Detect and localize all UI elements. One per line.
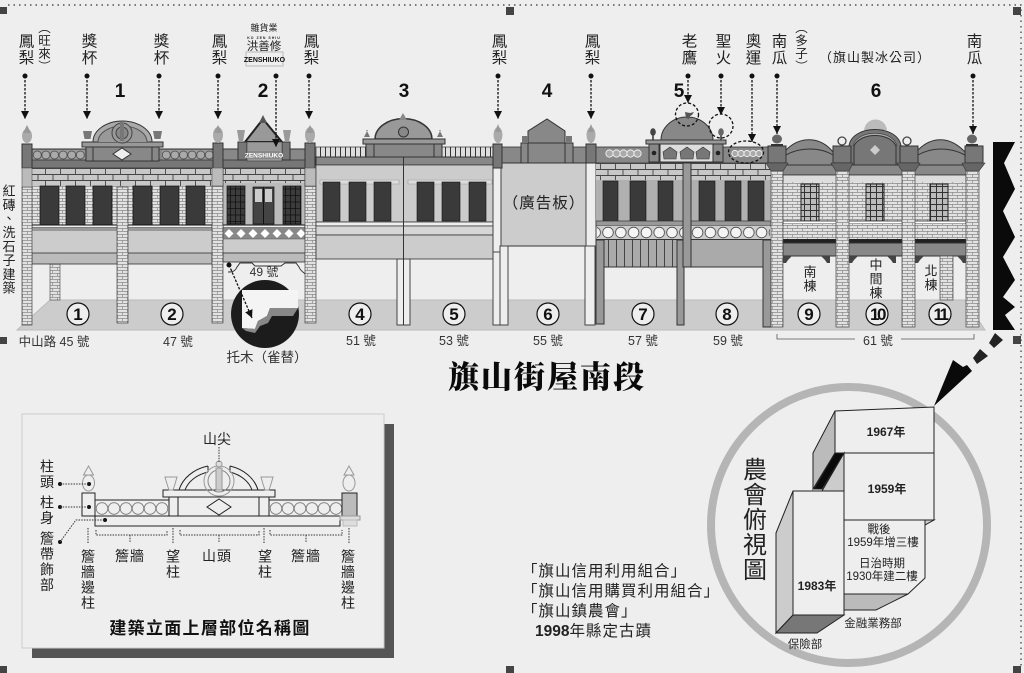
house number labels: 61 號 [863, 333, 893, 348]
panel: elevation naming diagram [22, 414, 394, 658]
circled numbers: 2 [167, 305, 177, 324]
house number labels: 53 號 [439, 333, 469, 348]
circled numbers: 4 [355, 305, 365, 324]
diagram labels: 望柱 [165, 549, 181, 580]
circled numbers: 7 [638, 305, 648, 324]
main title: 旗山街屋南段 [448, 360, 646, 395]
top labels: 聖火 [714, 33, 731, 66]
section numbers: 5 [674, 81, 685, 102]
pediment 5 with eagle, flame and Olympic ornaments [646, 112, 726, 162]
billboard [501, 163, 587, 246]
diagram labels: 簷帶飾部 [39, 531, 55, 593]
top labels: 獎杯 [80, 33, 97, 66]
roof blocks [776, 407, 934, 633]
roof scallops [786, 140, 965, 165]
leader lines [58, 447, 349, 544]
block labels: 1983年 [798, 578, 836, 593]
top labels: （多子） [793, 21, 807, 73]
dashed pointer arrow [934, 333, 1003, 406]
elevation drawing [82, 461, 360, 526]
top labels: 鳳梨 [302, 33, 319, 66]
section numbers [115, 81, 881, 102]
circled numbers: 9 [804, 305, 814, 324]
house number labels: 55 號 [533, 333, 563, 348]
history notes [522, 562, 720, 640]
top labels: 老鷹 [680, 33, 697, 66]
annotation arrows [22, 74, 976, 147]
diagram labels: 柱頭 [39, 459, 55, 490]
dashed highlight circles [676, 103, 764, 163]
circled numbers: 6 [543, 305, 553, 324]
black zigzag edge [993, 142, 1015, 330]
diagram labels [39, 431, 356, 611]
wing labels: 南棟 [802, 264, 816, 293]
house number labels: 47 號 [163, 334, 193, 349]
bracket caption: 托木（雀替） [226, 350, 308, 365]
block labels: 戰後 [868, 522, 890, 536]
building group 5: numbers 57 and 59 [596, 103, 771, 327]
top labels: 鳳梨 [210, 33, 227, 66]
wing labels: 北棟 [922, 264, 938, 292]
shop sign label: KO ZEN SHIU [247, 36, 281, 40]
circled numbers: 8 [722, 305, 732, 324]
wing labels: 中間棟 [868, 258, 882, 300]
shop sign label: 洪善修 [247, 39, 282, 53]
house number labels: 中山路 45 號 [19, 334, 90, 349]
section numbers: 3 [399, 81, 409, 102]
pediment 4 [521, 119, 573, 163]
block labels: 金融業務部 [844, 616, 902, 630]
section numbers: 2 [258, 81, 268, 102]
block labels: 1959年增三樓 [847, 535, 919, 549]
diagram labels: 柱身 [39, 495, 55, 526]
house number labels: 49 號 [250, 265, 278, 279]
block labels: 日治時期 [859, 556, 905, 570]
top labels: 鳳梨 [582, 33, 600, 66]
pediment 6 [838, 120, 911, 165]
top labels: 鳳梨 [16, 33, 34, 66]
house number labels: 59 號 [713, 333, 743, 348]
pediment 2 [237, 115, 291, 161]
pediment 1 [82, 121, 163, 161]
circled numbers: 5 [449, 305, 459, 324]
circled numbers [67, 303, 951, 325]
diagram labels: 簷牆邊柱 [340, 549, 356, 611]
diagram labels: 簷牆 [291, 548, 321, 564]
section numbers: 6 [871, 81, 881, 102]
wing labels [802, 258, 938, 300]
diagram labels: 簷牆邊柱 [80, 549, 96, 611]
diagram labels: 山尖 [203, 431, 231, 447]
diagram labels: 望柱 [257, 549, 273, 580]
brick pillars [771, 170, 979, 327]
history notes: 「旗山信用購買利用組合」 [522, 582, 720, 600]
building group 2: number 49 [212, 115, 316, 323]
house number labels [19, 265, 893, 349]
panel: aerial view [711, 387, 987, 663]
top labels [16, 21, 982, 73]
building group 4: number 55 with billboard: （廣告板） [503, 194, 585, 212]
circled numbers: 11 [934, 305, 949, 324]
circled numbers: 1 [73, 305, 83, 324]
building group 4: number 55 with billboard [493, 119, 596, 325]
history notes: 「旗山鎮農會」 [522, 602, 638, 620]
house number labels: 57 號 [628, 333, 658, 348]
shop sign label: ZENSHIUKO [244, 57, 286, 64]
shop sign label [244, 22, 286, 66]
top labels: 南瓜 [770, 33, 787, 66]
bracket detail circle [226, 262, 299, 348]
diagram labels: 山頭 [202, 548, 232, 564]
history notes: 1998年縣定古蹟 [535, 622, 652, 640]
block labels: 1967年 [867, 424, 905, 439]
top labels: （旗山製冰公司） [819, 50, 931, 65]
diagram labels: 簷牆 [115, 548, 145, 564]
top labels: 奧運 [744, 33, 761, 66]
side label: 紅磚、洗石子建築 [0, 184, 16, 295]
section numbers: 1 [115, 81, 126, 102]
diagram caption: 建築立面上層部位名稱圖 [109, 618, 311, 638]
block labels: 1930年建二樓 [846, 569, 918, 583]
top labels: 獎杯 [152, 33, 169, 66]
pediment 3 [363, 113, 445, 157]
top labels: （旺來） [36, 21, 50, 73]
top labels: 南瓜 [964, 33, 982, 66]
shop sign label: 雜貨業 [250, 22, 278, 33]
building group 1: numbers 45 and 47 [22, 121, 214, 325]
building group 6: number 61 [766, 120, 985, 327]
block labels: 1959年 [868, 481, 906, 496]
building group 3: numbers 51 and 53 [316, 113, 493, 325]
block labels: 保險部 [788, 637, 822, 651]
block labels [788, 424, 919, 651]
history notes: 「旗山信用利用組合」 [522, 562, 687, 580]
house number labels: 51 號 [346, 333, 376, 348]
circled numbers: 10 [870, 305, 886, 324]
ground street [17, 300, 985, 330]
section numbers: 4 [542, 81, 553, 102]
top labels: 鳳梨 [490, 33, 507, 66]
aerial title: 農會俯視圖 [738, 457, 766, 582]
sign text: ZENSHIUKO [245, 152, 283, 160]
